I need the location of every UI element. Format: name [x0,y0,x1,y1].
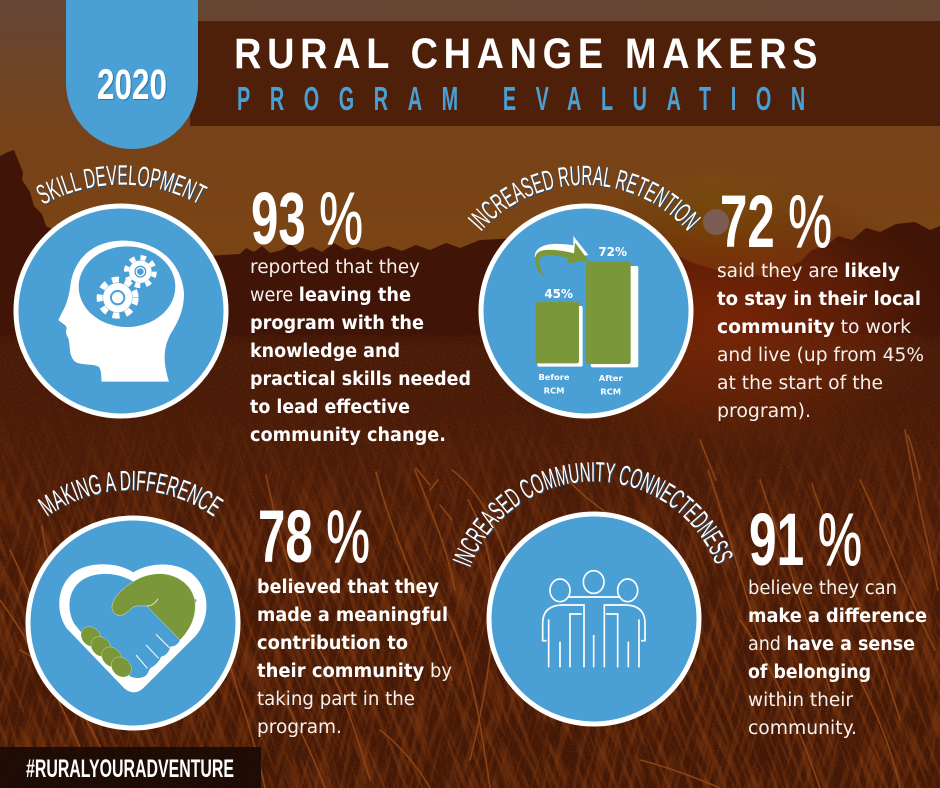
text: making a difference description: program. [257,717,342,738]
text: rural retention description: community to work [717,317,911,338]
icon: before and after bar chart: RCM [544,385,564,395]
year tab: 2020 [97,61,167,109]
text: making a difference description [257,577,452,738]
text: rural retention description: to stay in their local [717,289,921,310]
icon: before and after bar chart [481,206,691,416]
icon: before and after bar chart: After [599,373,623,383]
text: skill development description: reported that they [250,257,420,278]
text: rural retention description: said they are likely [717,261,900,282]
hashtag bar [0,747,261,788]
sun spot [703,209,729,235]
text: making a difference description: taking part in the [257,689,415,710]
subtitle: PROGRAM EVALUATION [237,80,805,117]
panel: increased community connectedness [452,462,927,739]
text: community connectedness description: believe they can [748,578,897,599]
text: making a difference description: contribution to [257,633,408,654]
text: community connectedness description [748,578,927,739]
text: skill development description: program with the [250,313,424,334]
heading: increased community connectedness: INCREASED COMMUNITY CONNECTEDNESS [452,462,734,568]
text: rural retention description: program). [717,401,811,422]
text: community connectedness description: and have a sense [748,634,915,655]
icon: three people [489,514,699,724]
stat: 72%: 72 % [720,180,832,263]
text: skill development description: practical skills needed [250,369,471,390]
text: rural retention description: at the start of the [717,373,883,394]
panel: making a difference [26,470,452,738]
text: community connectedness description: within their [748,690,853,711]
stat: 93%: 93 % [251,177,363,260]
text: community connectedness description: of belonging [748,662,871,683]
text: community connectedness description: make a difference [748,606,927,627]
icon: before and after bar chart: Before [538,372,570,382]
icon: handshake heart [28,518,238,728]
stat: 78%: 78 % [258,495,370,578]
stat: 91%: 91 % [749,498,862,581]
title: RURAL CHANGE MAKERS [234,29,818,78]
icon: head with gears [16,206,226,416]
text: making a difference description: believed that they [257,577,439,598]
text: skill development description: knowledge and [250,341,400,362]
hashtag bar: #RURALYOURADVENTURE [26,755,234,783]
text: skill development description [250,257,471,446]
text: skill development description: were leaving the [250,285,411,306]
panel: increased rural retention [468,166,924,422]
heading: making a difference: MAKING A DIFFERENCE [38,470,225,518]
text: making a difference description: their community by [257,661,452,682]
heading: skill development: SKILL DEVELOPMENT [36,165,209,204]
icon: before and after bar chart: 72% [598,245,627,259]
text: community connectedness description: community. [748,718,857,739]
text: rural retention description [717,261,924,422]
year tab [66,0,198,149]
text: skill development description: community change. [250,425,446,446]
header banner [66,0,940,149]
text: making a difference description: made a meaningful [257,605,448,626]
icon: before and after bar chart: RCM [600,386,621,396]
text: skill development description: to lead effective [250,397,410,418]
heading: increased rural retention: INCREASED RURAL RETENTION [468,166,702,232]
panel: skill development [14,165,471,446]
icon: before and after bar chart: 45% [544,287,573,301]
text: rural retention description: and live (up from 45% [717,345,924,366]
